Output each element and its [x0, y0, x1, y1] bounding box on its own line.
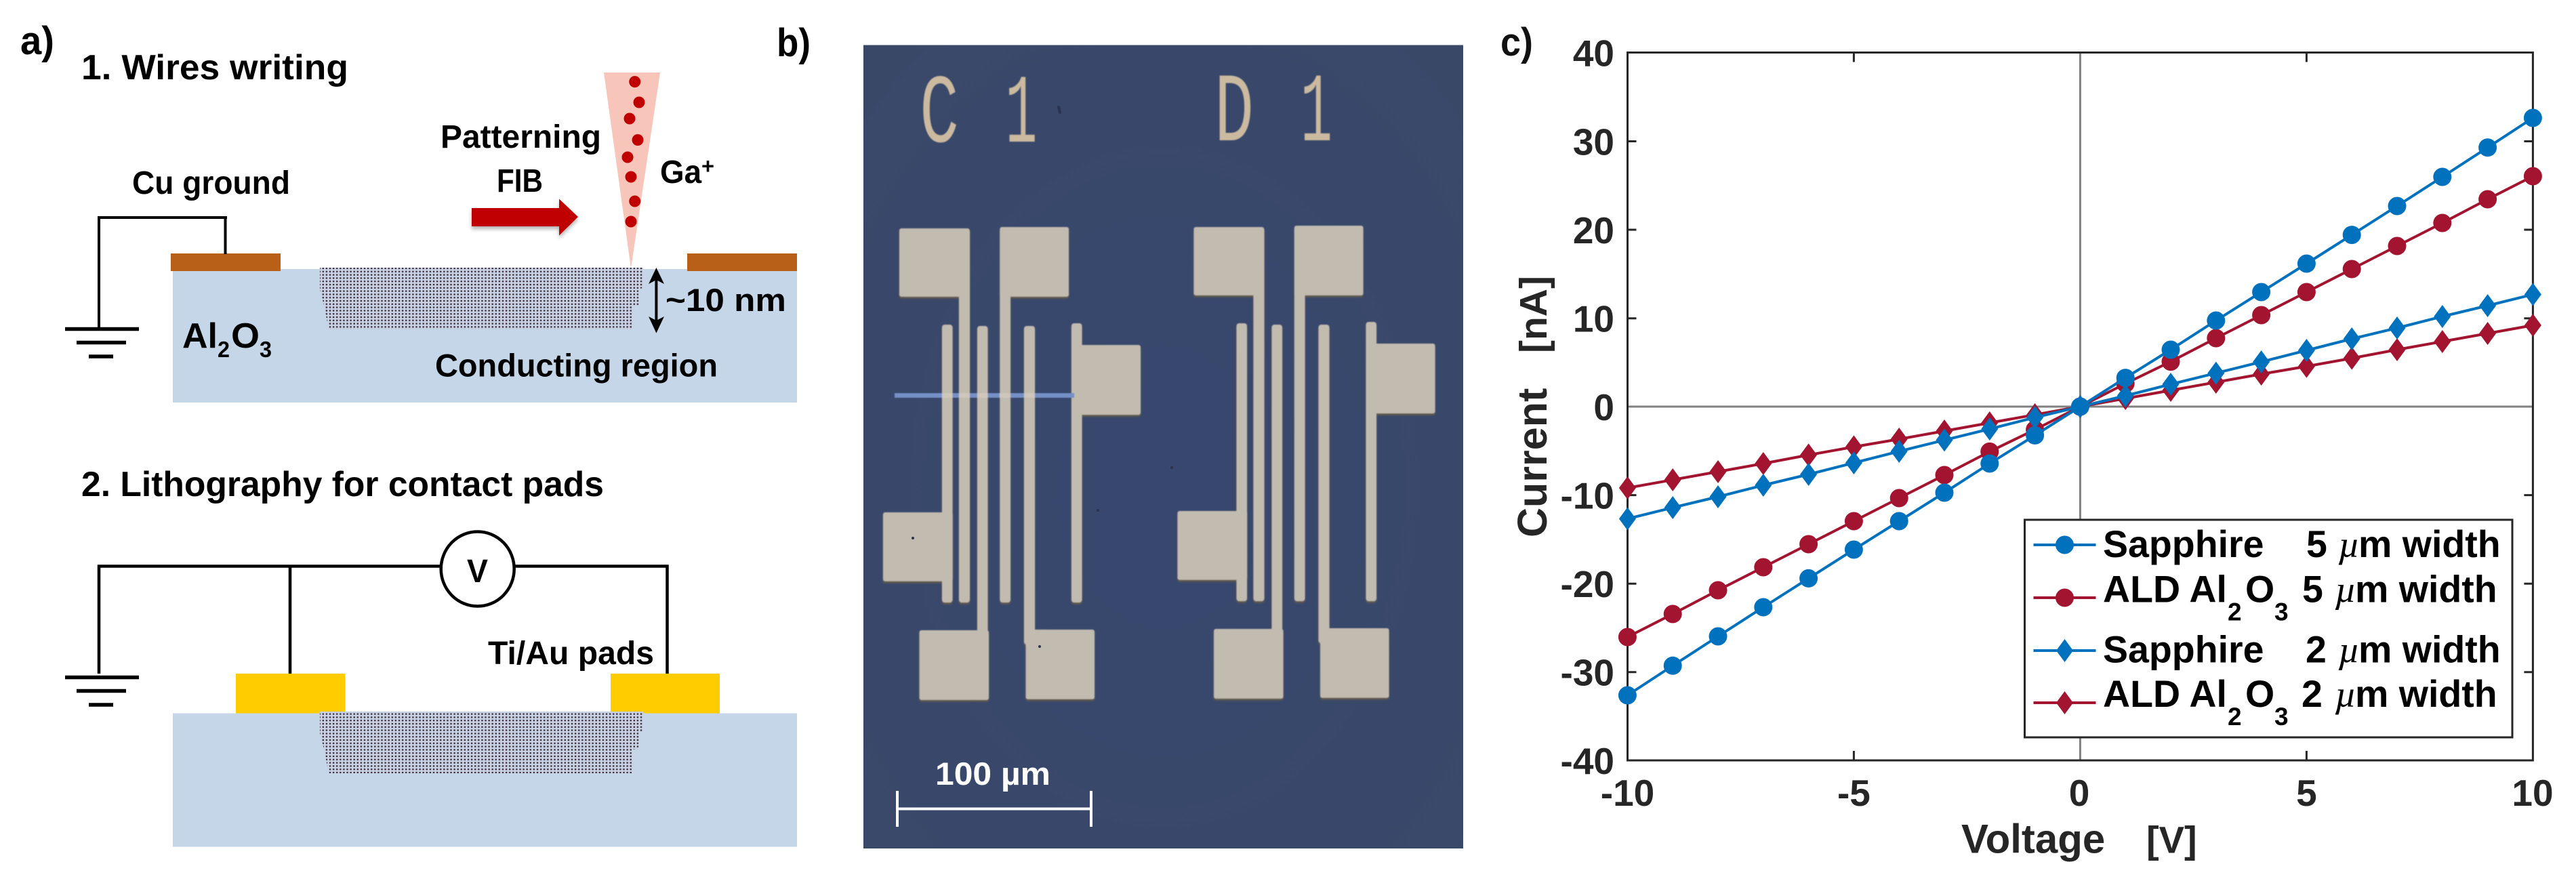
- specks on sample: [913, 107, 1172, 647]
- y axis title: [nA]: [1512, 276, 1555, 353]
- ground wire step 1: [99, 218, 227, 327]
- series: Sapphire 2 um: [1619, 283, 2541, 530]
- arrow: depth dimension: [649, 268, 664, 333]
- x axis tick labels: [1601, 772, 2554, 814]
- legend key: ALD 5 um: [2033, 588, 2095, 607]
- label: 10 nm depth: ~10 nm: [666, 282, 786, 318]
- legend text: ALD 2 um: 2: [2302, 673, 2323, 715]
- conducting region step 1: [320, 268, 643, 329]
- device labels: C: [920, 60, 959, 172]
- contact: Cu right: [687, 253, 797, 271]
- device labels: 1: [1301, 58, 1332, 170]
- legend key: Sapphire 2 um: [2033, 639, 2095, 662]
- scale bar label: 100 µm: [935, 756, 1050, 792]
- device labels: [920, 58, 1332, 172]
- plot frame and ticks: [1628, 53, 2533, 760]
- panel label c: c): [1500, 20, 1533, 64]
- x axis tick labels: 5: [2296, 772, 2317, 814]
- contact: Cu ground left: [171, 253, 281, 271]
- photo background: [863, 45, 1463, 848]
- x axis tick labels: -5: [1837, 772, 1870, 814]
- legend text: ALD 2 um: m width: [2355, 673, 2497, 715]
- contact: Ti/Au pad right: [611, 674, 720, 713]
- legend text: Sapphire 5 um: Sapphire: [2103, 523, 2264, 565]
- substrate: Al2O3 step 1: [173, 269, 797, 403]
- y axis title: Current: [1509, 388, 1555, 537]
- device D electrodes: [1178, 226, 1435, 699]
- legend text: Sapphire 2 um: µ: [2338, 630, 2360, 671]
- laser scratch line: [895, 393, 1074, 398]
- series: ALD Al2O3 5 um: [1627, 176, 2533, 637]
- legend text: Sapphire 2 um: Sapphire: [2103, 629, 2264, 671]
- substrate step 2: [173, 713, 797, 847]
- panel a: process schematic: [20, 19, 797, 847]
- y axis tick labels: 20: [1573, 209, 1614, 251]
- device labels: 1: [1006, 60, 1037, 171]
- conducting region step 2: [320, 712, 643, 773]
- series: ALD Al2O3 2 um: [1619, 314, 2541, 499]
- panel label b: b): [777, 21, 811, 65]
- label: Patterning FIB: Patterning: [441, 119, 601, 155]
- y axis tick labels: -10: [1560, 474, 1614, 516]
- panel b: micrograph: [863, 45, 1463, 848]
- heading: step 2: 2. Lithography for contact pads: [81, 465, 604, 504]
- y axis tick labels: 40: [1573, 33, 1614, 75]
- icon: ground symbol step 1: [65, 329, 139, 356]
- label: Al2O3: 2: [218, 337, 230, 362]
- legend text: Sapphire 2 um: m width: [2358, 629, 2501, 671]
- legend text: ALD 2 um: O: [2245, 673, 2274, 715]
- arrow: FIB direction: [472, 199, 578, 236]
- legend text: ALD 5 um: m width: [2355, 568, 2497, 610]
- legend key: Sapphire 5 um: [2033, 535, 2095, 554]
- legend key: ALD 2 um: [2033, 691, 2095, 714]
- label: Al2O3: O: [231, 316, 260, 356]
- panel label a: a): [20, 19, 54, 63]
- legend text: ALD 5 um: µ: [2335, 569, 2356, 611]
- label: Al2O3: Al: [182, 316, 218, 356]
- legend text: Sapphire 5 um: µ: [2338, 525, 2360, 566]
- legend text: Sapphire 5 um: 5: [2306, 523, 2327, 565]
- y axis tick labels: -40: [1560, 740, 1614, 782]
- zero reference lines: [1628, 53, 2533, 760]
- legend text: Sapphire 2 um: 2: [2306, 629, 2327, 671]
- y axis tick labels: -20: [1560, 563, 1614, 605]
- legend text: ALD 5 um: 2: [2228, 598, 2242, 626]
- y axis tick labels: 30: [1573, 121, 1614, 163]
- legend text: ALD 5 um: 5: [2302, 568, 2323, 610]
- ion beam: [604, 73, 660, 268]
- device labels: D: [1214, 59, 1254, 171]
- heading: step 1: 1. Wires writing: [81, 48, 348, 87]
- y axis tick labels: 10: [1573, 298, 1614, 340]
- scale bar: [897, 756, 1091, 827]
- legend text: ALD 2 um: ALD Al: [2103, 673, 2227, 715]
- device C electrodes: [883, 227, 1141, 700]
- y axis tick labels: 0: [1593, 386, 1614, 428]
- panel c: I-V chart: [1509, 33, 2554, 862]
- x axis tick labels: -10: [1601, 772, 1654, 814]
- legend text: ALD 2 um: 2: [2228, 703, 2242, 731]
- label: Al2O3: [182, 316, 272, 362]
- y axis tick labels: -30: [1560, 652, 1614, 694]
- x axis title: Voltage: [1961, 816, 2105, 862]
- legend text: ALD 5 um: 3: [2274, 598, 2289, 626]
- label: Ti/Au pads: Ti/Au pads: [488, 636, 654, 672]
- icon: ground symbol step 2: [65, 678, 139, 705]
- legend text: ALD 5 um: O: [2245, 568, 2274, 610]
- label: Conducting region: Conducting region: [435, 347, 718, 384]
- series: Sapphire 5 um: [1627, 118, 2533, 695]
- legend: [2025, 520, 2512, 737]
- label: Ga+: +: [701, 154, 714, 178]
- legend text: ALD 2 um: 3: [2274, 703, 2289, 731]
- icon: voltmeter: [441, 531, 514, 606]
- x axis tick labels: 10: [2512, 772, 2554, 814]
- circuit wires step 2: [99, 567, 667, 674]
- label: Cu ground: Cu ground: [132, 165, 290, 201]
- y axis tick labels: [1560, 33, 1614, 782]
- legend text: Sapphire 5 um: m width: [2358, 523, 2501, 565]
- legend text: ALD 2 um: µ: [2335, 674, 2356, 716]
- label: Patterning FIB: FIB: [497, 163, 543, 199]
- x axis title: [V]: [2146, 819, 2197, 861]
- label: Al2O3: 3: [260, 337, 272, 362]
- x axis tick labels: 0: [2069, 772, 2089, 814]
- label: Patterning FIB: [441, 119, 601, 199]
- legend text: ALD 5 um: ALD Al: [2103, 568, 2227, 610]
- icon: voltmeter: V: [467, 554, 488, 590]
- label: Ga+: Ga: [660, 155, 701, 190]
- contact: Ti/Au pad left: [236, 674, 346, 713]
